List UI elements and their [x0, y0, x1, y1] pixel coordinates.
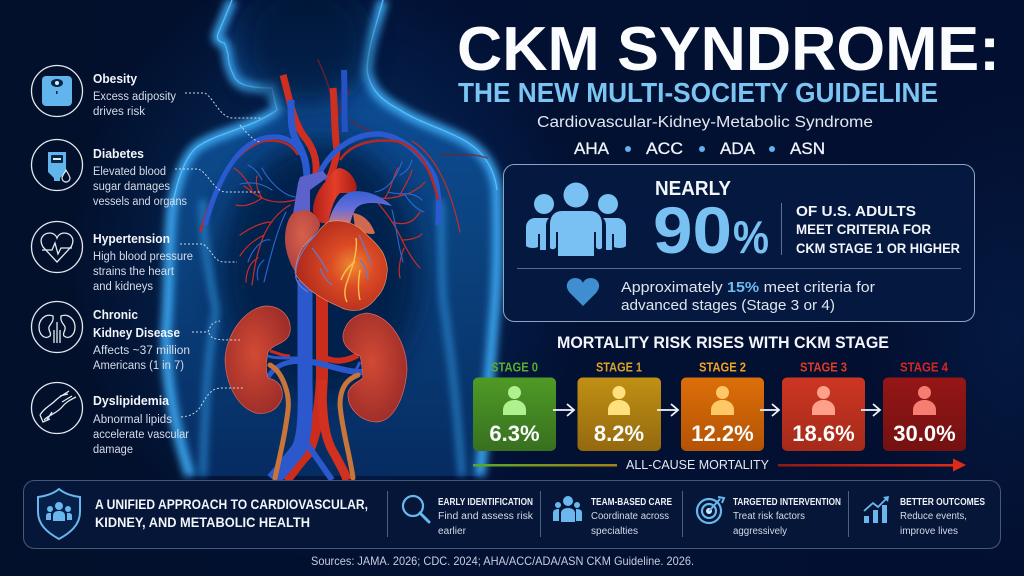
human body silhouette — [166, 0, 498, 476]
risk item: chronic kidney disease: Kidney Disease — [93, 325, 180, 340]
vena cava and aorta trunks — [268, 280, 362, 480]
stage arrows — [553, 404, 880, 416]
targeted intervention: aggressively — [733, 526, 787, 537]
risk item: chronic kidney disease: Affects ~37 million — [93, 345, 190, 357]
stage 4: 30.0% — [893, 421, 956, 446]
early identification — [403, 496, 534, 537]
stage 2: STAGE 2 — [699, 360, 746, 374]
stage 1: STAGE 1 — [596, 360, 642, 374]
stat: nearly 90%: 90 — [653, 193, 732, 267]
stage 4 — [883, 360, 966, 451]
risk item: diabetes — [32, 140, 187, 208]
leader lines — [175, 93, 262, 417]
panel: unified approach — [24, 480, 1000, 548]
heading: mortality risk: MORTALITY RISK RISES WITH CKM STAGE — [557, 333, 889, 352]
early identification: earlier — [438, 526, 467, 537]
sources: Sources: JAMA. 2026; CDC. 2024; AHA/ACC/ADA/ASN CKM Guideline. 2026. — [311, 554, 694, 568]
risk item: dyslipidemia: Abnormal lipids — [93, 414, 172, 426]
risk item: obesity: Excess adiposity — [93, 91, 176, 103]
unified approach heading: A UNIFIED APPROACH TO CARDIOVASCULAR, — [95, 497, 368, 512]
stage 1 — [578, 360, 661, 451]
stage 4: STAGE 4 — [900, 360, 949, 374]
stage 0: STAGE 0 — [491, 360, 538, 374]
risk item: obesity — [32, 66, 176, 118]
team-based care — [553, 496, 672, 537]
early identification: Find and assess risk — [438, 511, 534, 522]
better outcomes: BETTER OUTCOMES — [900, 497, 985, 508]
stage 2: 12.2% — [691, 421, 754, 446]
early identification: EARLY IDENTIFICATION — [438, 497, 533, 508]
stat: nearly 90%: % — [733, 211, 769, 263]
title: CKM SYNDROME: — [457, 15, 1000, 84]
advanced stages note: advanced stages (Stage 3 or 4) — [621, 297, 835, 314]
subtitle: Cardiovascular-Kidney-Metabolic Syndrome — [537, 114, 873, 131]
risk item: hypertension — [32, 222, 193, 293]
team-based care: Coordinate across — [591, 511, 669, 522]
icon: three people — [526, 182, 626, 256]
team-based care: specialties — [591, 526, 638, 537]
right kidney — [343, 313, 407, 422]
stage 0: 6.3% — [489, 421, 540, 446]
lung and arm branching vessels — [205, 60, 487, 285]
society names: ACC — [646, 140, 683, 158]
unified approach heading: KIDNEY, AND METABOLIC HEALTH — [95, 515, 310, 530]
better outcomes — [864, 496, 985, 537]
risk item: dyslipidemia — [32, 382, 189, 456]
risk item: chronic kidney disease — [32, 302, 190, 372]
icon: shield — [38, 489, 80, 539]
risk item: obesity: Obesity — [93, 71, 138, 86]
risk item: diabetes: Elevated blood — [93, 166, 166, 178]
targeted intervention — [697, 497, 841, 537]
team-based care: TEAM-BASED CARE — [591, 497, 672, 508]
stage 1: 8.2% — [594, 421, 644, 446]
risk item: obesity: drives risk — [93, 106, 145, 118]
stage 3: STAGE 3 — [800, 360, 847, 374]
stat description — [796, 203, 960, 256]
stat description: MEET CRITERIA FOR — [796, 222, 931, 237]
targeted intervention: Treat risk factors — [733, 511, 805, 522]
stage 2 — [681, 360, 764, 451]
risk item: dyslipidemia: Dyslipidemia — [93, 393, 170, 408]
stat: nearly 90%: NEARLY — [655, 178, 732, 200]
risk item: hypertension: High blood pressure — [93, 251, 193, 263]
society names: ASN — [790, 140, 825, 158]
advanced stages note: Approximately 15% meet criteria for — [621, 279, 875, 296]
risk item: dyslipidemia: accelerate vascular — [93, 429, 189, 441]
society names: AHA — [574, 140, 609, 158]
risk item: hypertension: and kidneys — [93, 281, 153, 293]
risk item: diabetes: sugar damages — [93, 181, 170, 193]
panel: prevalence — [504, 164, 974, 322]
icon: heart — [567, 278, 599, 306]
stage 3: 18.6% — [792, 421, 855, 446]
heart — [285, 168, 392, 310]
risk item: dyslipidemia: damage — [93, 444, 133, 456]
risk item: chronic kidney disease: Chronic — [93, 307, 138, 322]
all-cause mortality axis — [473, 457, 966, 472]
all-cause mortality axis: ALL-CAUSE MORTALITY — [626, 457, 769, 472]
unified approach heading — [95, 497, 368, 530]
stat description: OF U.S. ADULTS — [796, 203, 916, 220]
advanced stages note — [621, 279, 875, 314]
stage 0 — [473, 360, 556, 451]
ureters — [270, 365, 358, 478]
risk item: hypertension: Hypertension — [93, 231, 170, 246]
chart: mortality by stage — [473, 360, 966, 472]
title: THE NEW MULTI-SOCIETY GUIDELINE — [458, 77, 938, 108]
risk item: diabetes: Diabetes — [93, 146, 144, 161]
risk item: chronic kidney disease: Americans (1 in 7) — [93, 360, 184, 372]
stat description: CKM STAGE 1 OR HIGHER — [796, 241, 960, 256]
better outcomes: improve lives — [900, 526, 958, 537]
torso interior shading — [220, 140, 420, 400]
left kidney — [225, 306, 290, 413]
panel: risk factors — [32, 66, 193, 456]
risk item: hypertension: strains the heart — [93, 266, 175, 278]
great vessels — [200, 70, 439, 232]
stat: nearly 90% — [653, 178, 769, 267]
society names: ADA — [720, 140, 755, 158]
targeted intervention: TARGETED INTERVENTION — [733, 497, 841, 508]
society names — [574, 140, 825, 158]
stage 3 — [782, 360, 865, 451]
better outcomes: Reduce events, — [900, 511, 967, 522]
risk item: diabetes: vessels and organs — [93, 196, 187, 208]
